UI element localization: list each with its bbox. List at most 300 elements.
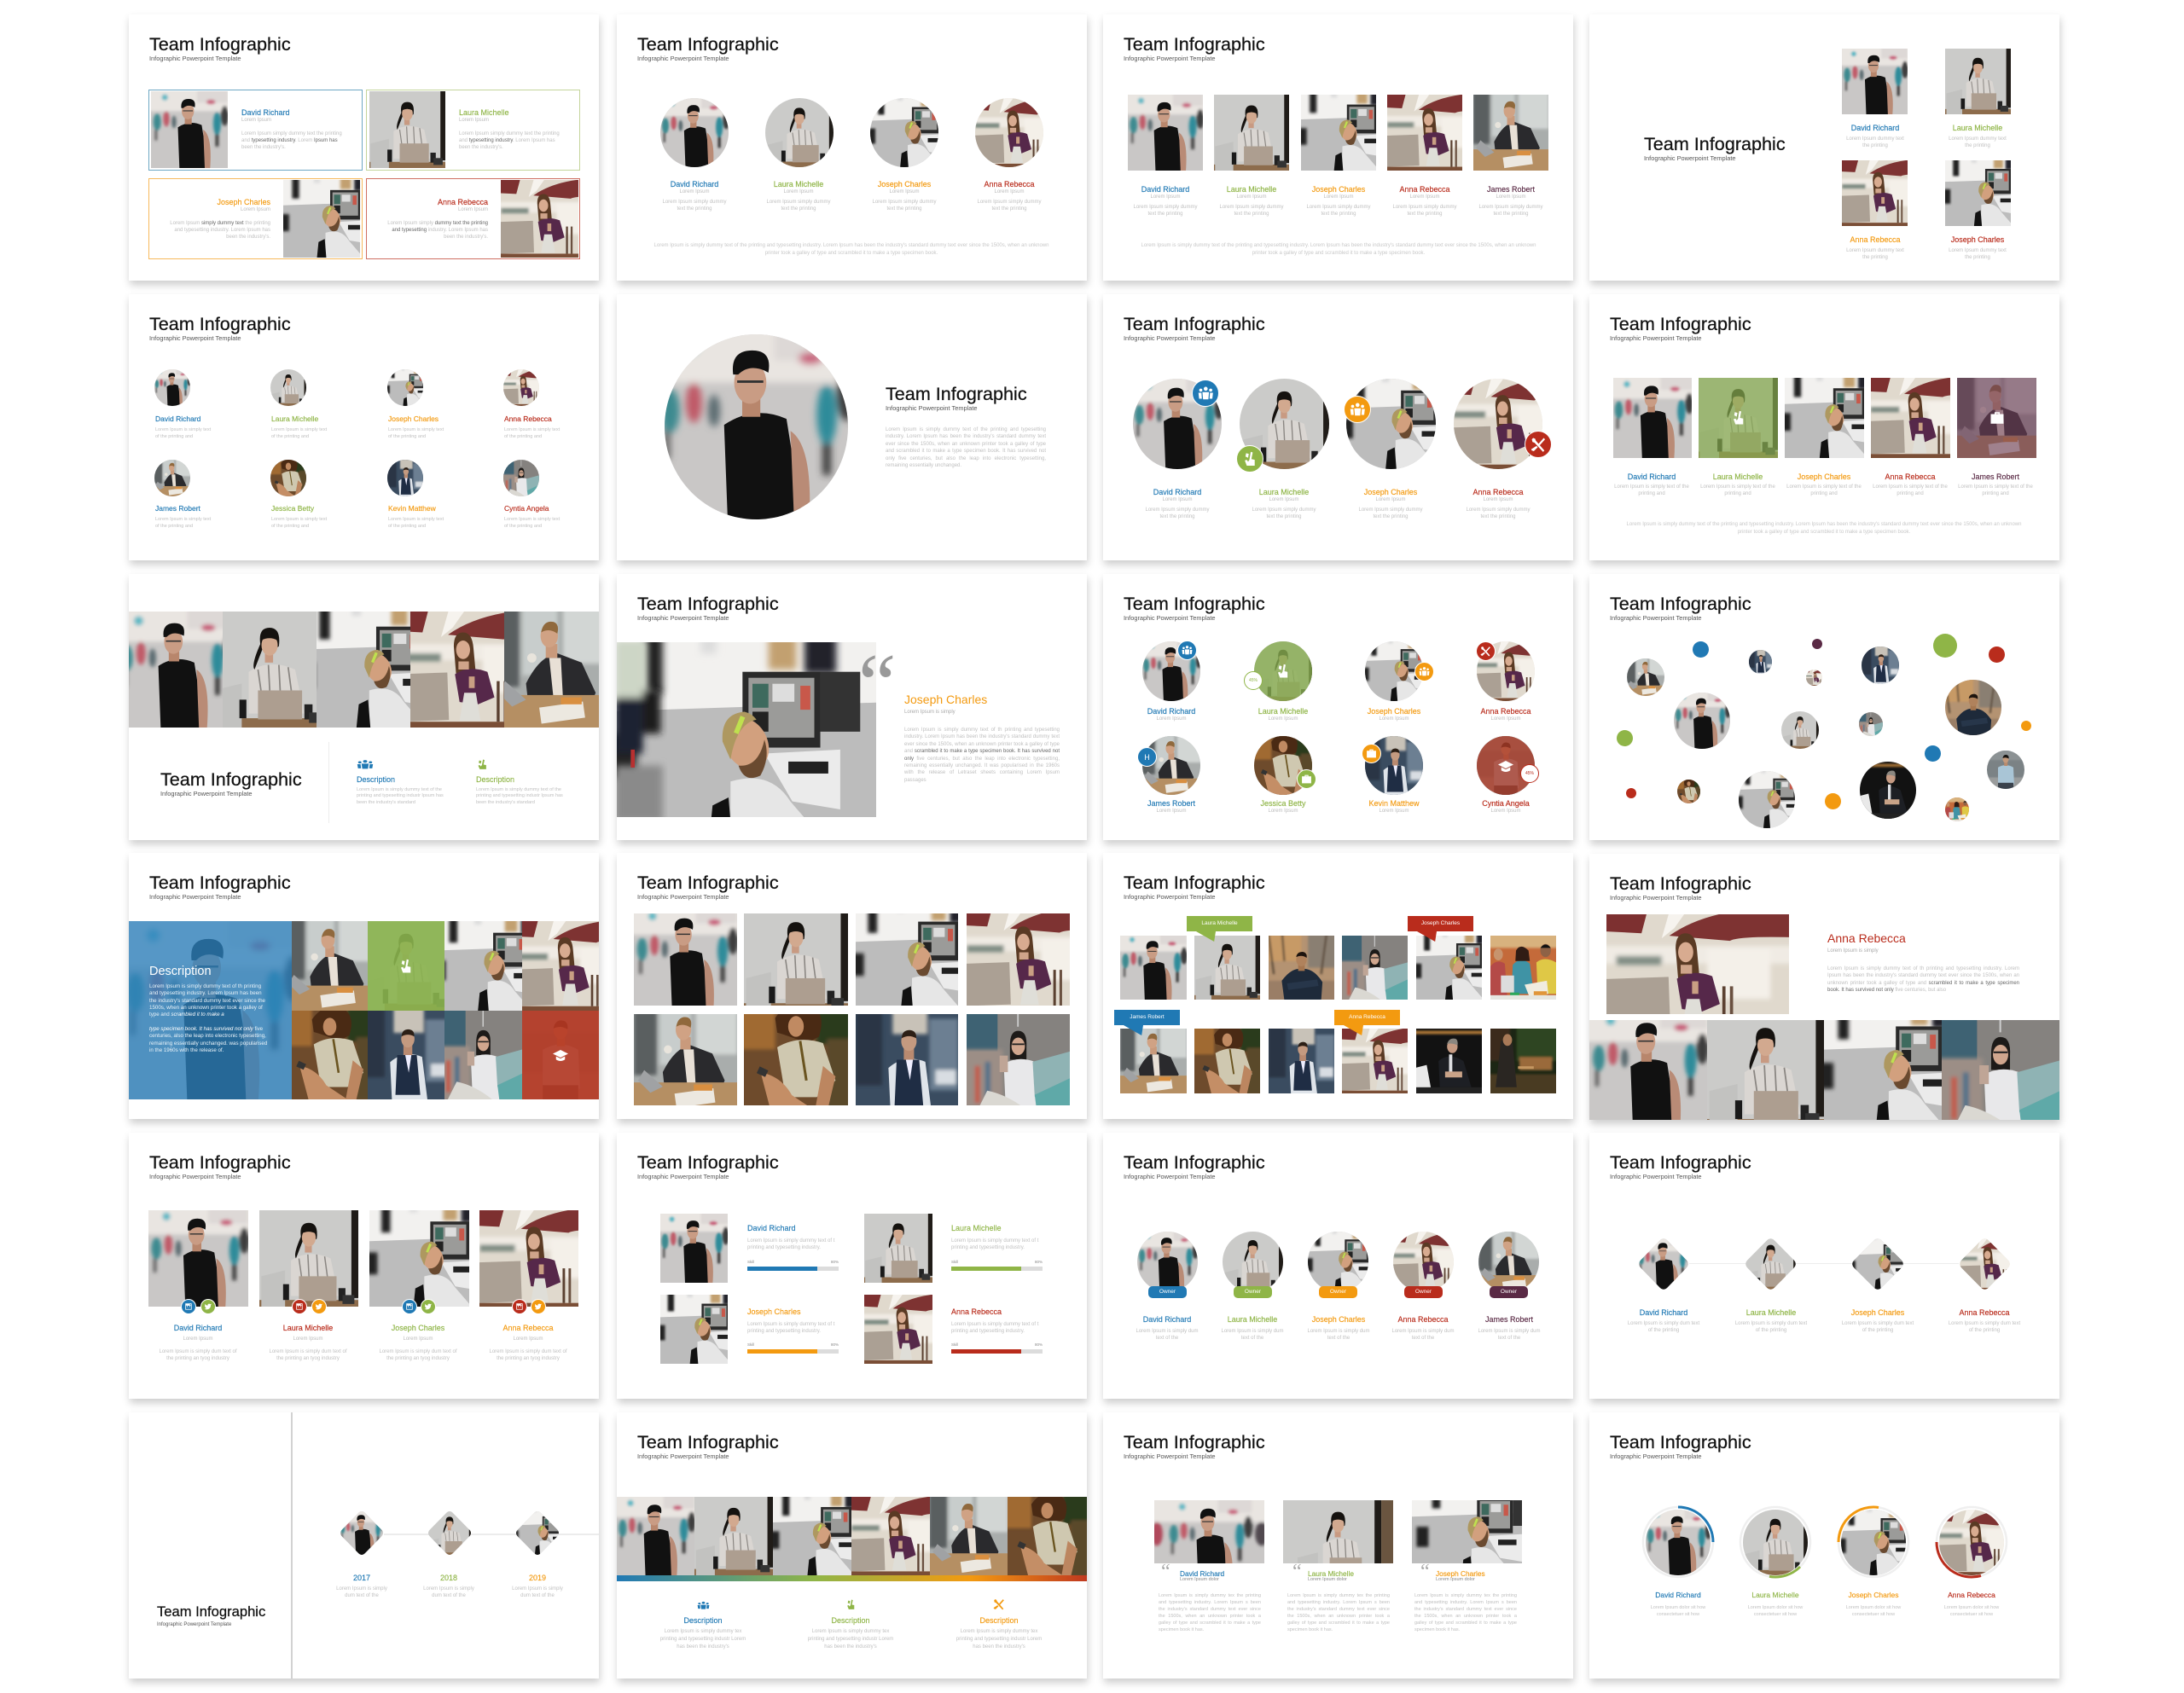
description one: Description [683, 1616, 723, 1625]
dot green [1933, 634, 1957, 658]
blue tinted block [129, 921, 292, 1099]
portrait: Kevin [1365, 736, 1423, 795]
text: David: been the industry's. [241, 145, 286, 150]
panel: circles with icon badges [1103, 294, 1573, 560]
photo: Anna [501, 180, 578, 258]
badge: 45 percent green [1244, 671, 1263, 690]
text: Kevin [1347, 799, 1441, 815]
text: David: David Richard [671, 180, 718, 188]
text: David [1124, 707, 1218, 722]
divider [328, 742, 329, 823]
portrait: David [1133, 379, 1222, 469]
title: Team Infographic [1124, 592, 1265, 614]
band: Laura [694, 1497, 773, 1575]
social: red [292, 1299, 307, 1314]
text: Laura: Laura Michelle [951, 1224, 1002, 1232]
text: Joseph [170, 198, 270, 240]
title: Infographic Powerpoint Template [1610, 894, 1702, 902]
text: Anna [1392, 185, 1457, 217]
photo: Laura [1214, 95, 1289, 171]
text: David: David Richard [1143, 1315, 1191, 1324]
diamond: Anna [1960, 1238, 2010, 1290]
text: Laura [1691, 473, 1785, 497]
text: David: Lorem Ipsum [241, 118, 271, 123]
ring: Anna [1934, 1505, 2009, 1580]
tile: Cyntia [444, 1011, 522, 1099]
text: David: Lorem Ipsum is simply dum [1136, 1329, 1199, 1334]
text: Joseph [371, 1324, 465, 1362]
bubble: group [1945, 797, 1969, 821]
text: David: Lorem Ipsum is simply dum text of [159, 1349, 237, 1354]
text: David: Lorem Ipsum dolor sit how [1651, 1605, 1705, 1610]
text: Anna [1937, 1308, 2031, 1334]
band: Jessica [1008, 1497, 1087, 1575]
caption: printer took a galley of type and scrambled it to make a type specimen book. [1738, 530, 1910, 535]
title: Infographic Powerpoint Template [637, 893, 729, 901]
bubble: blue-shirt man [1987, 751, 2024, 789]
title [1610, 1151, 1755, 1182]
panel: photo band with gradient bar and three descriptions [617, 1412, 1087, 1679]
text: Anna: Lorem Ipsum is simply dum text [1949, 1320, 2020, 1325]
caption: Lorem Ipsum is simply dummy text of the printing and typesetting industry. Lorem Ipsum has been the industry's standard dummy text ever since the 1500s, when an unknown [1141, 243, 1536, 248]
portrait: Anna [503, 369, 539, 406]
diamond: David [1639, 1238, 1688, 1290]
skill label: Laura: Skill [951, 1260, 958, 1264]
text: David: David Richard [155, 415, 200, 423]
caption: printer took a galley of type and scrambled it to make a type specimen book. [1252, 251, 1425, 256]
badge: blue [1137, 747, 1157, 767]
caption: Lorem Ipsum is simply dummy text of the printing and typesetting industry. Lorem Ipsum has been the industry's standard dummy text ever since the 1500s, when an unknown [654, 243, 1048, 248]
description body: and typesetting industry. Lorem Ipsum has been [149, 990, 262, 996]
text: David: Lorem Ipsum simply dummy [1145, 507, 1210, 513]
skill label: David: Skill [747, 1260, 754, 1264]
text: David [1133, 185, 1198, 217]
panel: circles with owner pills [1103, 1133, 1573, 1399]
text: Anna: text of the [1412, 1336, 1434, 1341]
text: Laura: text the printing [1234, 212, 1269, 217]
photo 10 [1342, 1029, 1408, 1093]
photo 7 [1120, 1029, 1187, 1093]
tile: Laura green [368, 921, 444, 1011]
text: Laura: text of the [1241, 1336, 1263, 1341]
text: Laura: Laura Michelle [1227, 185, 1276, 194]
text: David [151, 1324, 245, 1362]
name block: Laura: Lorem Ipsum dolor [1308, 1577, 1347, 1582]
text: Anna: Anna Rebecca [1948, 1591, 1995, 1599]
skill bar: Joseph [747, 1349, 839, 1354]
grid photo: David [634, 913, 737, 1006]
skill label: David: 80% [831, 1260, 839, 1264]
text: James [1949, 473, 2042, 497]
text: David: Lorem Ipsum is simply text [155, 426, 211, 432]
text: Joseph: text the printing [1321, 212, 1356, 217]
text: Laura: text the printing [781, 206, 816, 212]
title: Team Infographic [1610, 1151, 1751, 1172]
description two: Lorem Ipsum is simply dummy text of the [476, 786, 561, 791]
text: Anna: Anna Rebecca [1472, 488, 1524, 496]
photo: Anna [1871, 378, 1950, 458]
band: Joseph [1824, 1020, 1942, 1120]
text: Laura: Laura Michelle [1751, 1591, 1799, 1599]
card border: Anna [366, 178, 580, 259]
text: David: David Richard [1141, 185, 1189, 194]
text: Laura [459, 108, 560, 150]
title: Infographic Powerpoint Template [149, 1173, 241, 1180]
text: Laura: Lorem Ipsum simply dummy [1219, 205, 1284, 210]
text: Laura [271, 415, 357, 440]
title: Team Infographic [149, 312, 291, 334]
panel: four bordered profile cards [129, 14, 599, 281]
text: Anna: consectetuer sit how [1950, 1612, 1993, 1617]
title: Team Infographic [637, 1431, 779, 1452]
text: Joseph: Lorem Ipsum dolor sit how [1846, 1605, 1901, 1610]
panel: twelve photos with callouts [1103, 853, 1573, 1119]
social: blue [181, 1299, 196, 1314]
photo: James [1473, 95, 1548, 171]
social: red 2 [512, 1299, 527, 1314]
text: Anna: printing and typesetting industry. [951, 1329, 1025, 1334]
pill: James: Owner [1501, 1289, 1517, 1295]
photo 1 [1120, 936, 1187, 1000]
social: green [200, 1299, 215, 1314]
text: Laura: Laura Michelle [1258, 707, 1308, 716]
text: Kevin [388, 504, 473, 530]
title: Infographic Powerpoint Template [1644, 154, 1736, 162]
diamond: 2019 [516, 1511, 559, 1555]
diamond: Laura [1745, 1238, 1796, 1290]
panel: circles with colored progress rings [1589, 1412, 2059, 1679]
portrait: Anna [1393, 1232, 1454, 1292]
badge: green [1297, 769, 1316, 789]
badge: 45 percent red: 45% [1525, 771, 1534, 776]
text: David: Lorem Ipsum simply dummy text the printing [241, 131, 342, 136]
grid photo: Laura [744, 913, 848, 1006]
text: David: printing and typesetting industry. [747, 1245, 821, 1250]
text: James: Lorem Ipsum simply dummy [1478, 205, 1543, 210]
text: 2017: dum text of the [345, 1593, 379, 1598]
description three: has been the industry's [973, 1644, 1025, 1650]
photo: David [129, 612, 223, 728]
text: Cyntia: Cyntia Angela [504, 504, 549, 513]
skill label: Anna: Skill [951, 1342, 958, 1347]
text: Anna: text the printing [1480, 514, 1516, 519]
text: Anna: text the printing [1407, 212, 1443, 217]
text: Anna: Anna Rebecca [504, 415, 552, 423]
description two [476, 775, 583, 807]
title: Infographic Powerpoint Template [1124, 1173, 1216, 1180]
name block: David: David Richard [1180, 1569, 1224, 1578]
text: Joseph: Lorem Ipsum simply dummy text the printing [170, 221, 270, 226]
skill label: David [747, 1260, 839, 1265]
photo: Anna [864, 1295, 932, 1364]
text: Anna: Lorem Ipsum is simply text of the [1873, 484, 1948, 490]
tile: James [292, 921, 368, 1011]
text: Anna: Anna Rebecca [1885, 473, 1936, 481]
text: 2017: Lorem Ipsum is simply [336, 1586, 387, 1592]
text: Anna: Anna Rebecca [984, 180, 1035, 188]
text: James [155, 504, 241, 530]
text: Joseph: Joseph Charles [878, 180, 931, 188]
text: Laura [1949, 124, 2007, 148]
text: Anna: Lorem Ipsum simply dummy [1466, 507, 1531, 513]
text: Joseph [1344, 488, 1438, 520]
text: Laura: Lorem Ipsum [1269, 497, 1298, 502]
text: Laura: Laura Michelle [459, 108, 509, 117]
bubble: David [1674, 693, 1730, 749]
bubble: Laura [1781, 711, 1819, 749]
text: James [1478, 185, 1543, 217]
band: Laura [1707, 1020, 1824, 1120]
badge: red tools [1476, 641, 1496, 661]
portrait: Anna [1477, 641, 1535, 701]
text: James: text of the [1498, 1336, 1520, 1341]
title: Team Infographic [1124, 872, 1265, 892]
photo: Joseph [1412, 1500, 1522, 1563]
photo: Anna [1842, 160, 1908, 226]
title: Team Infographic [1610, 312, 1751, 334]
text: David: David Richard [747, 1224, 796, 1232]
text: Laura: text the printing [1266, 514, 1302, 519]
text: David: of the printing and [155, 434, 193, 439]
panel: scattered bubbles [1589, 574, 2059, 840]
bubble: dark suit [1860, 762, 1916, 819]
description three [944, 1616, 1054, 1651]
title: Infographic Powerpoint Template [1124, 1452, 1216, 1460]
text: Kevin: Lorem Ipsum [1379, 809, 1409, 814]
photo: Joseph [660, 1295, 728, 1364]
text: Cyntia [504, 504, 590, 530]
text: Kevin: of the printing and [388, 524, 426, 529]
card border: Joseph [148, 178, 363, 259]
text: Joseph [1949, 235, 2007, 260]
diamond: 2017 [340, 1511, 383, 1555]
dot blue [1693, 641, 1709, 658]
photo: Anna [410, 612, 504, 728]
text: Joseph: Lorem Ipsum is simply dum text [1842, 1320, 1914, 1325]
text: Joseph [747, 1307, 841, 1334]
text: Joseph: Lorem Ipsum [1375, 497, 1406, 502]
text: David: David Richard [1640, 1308, 1687, 1317]
name block: Laura: Laura Michelle [1308, 1569, 1354, 1578]
text: David: Lorem Ipsum is simply text of the [1614, 484, 1689, 490]
description one: Description [357, 775, 395, 784]
portrait: Joseph [1841, 1510, 1906, 1575]
text: James: James Robert [1485, 1315, 1533, 1324]
text: James: Lorem Ipsum is simply dum [1478, 1329, 1541, 1334]
title: Infographic Powerpoint Template [1124, 334, 1216, 342]
caption: Lorem Ipsum is simply dummy text of the printing and typesetting industry. Lorem Ipsum has been the industry's standard dummy text ever since the 1500s, when an unknown [1627, 522, 2021, 527]
text: Laura [766, 180, 831, 212]
text: Laura: Lorem Ipsum is simply text [271, 426, 327, 432]
photo: Joseph [283, 180, 360, 258]
badge: orange [1414, 662, 1434, 681]
bubble: Anna small [1806, 670, 1822, 686]
text: Joseph: Lorem Ipsum is simply text [388, 426, 444, 432]
grid photo: Cyntia [967, 1014, 1070, 1105]
text: Anna: Anna Rebecca [1397, 1315, 1449, 1324]
skill bar: Laura [951, 1266, 1043, 1271]
text: Joseph: text the printing [886, 206, 922, 212]
description body: 1500s, when an unknown printer took a galley of [149, 1005, 263, 1011]
text: David: David Richard [1147, 707, 1195, 716]
text: David [747, 1224, 841, 1250]
text: Joseph: Joseph Charles [388, 415, 439, 423]
text: Cyntia: Lorem Ipsum is simply text [504, 517, 560, 522]
text: Anna: Lorem Ipsum simply dummy text the printing [387, 221, 488, 226]
description body: type specimen book. It has survived not only five [149, 1026, 263, 1032]
text: Joseph: of the printing and [388, 434, 426, 439]
social: orange [311, 1299, 327, 1314]
title: Team Infographic [1610, 872, 1751, 894]
photo: Laura [1283, 1500, 1393, 1563]
text: Joseph [872, 180, 937, 212]
photo: Laura [223, 612, 317, 728]
pill: Laura [1234, 1286, 1272, 1298]
description body: centuries, also the leap into electronic typesetting, [149, 1033, 266, 1039]
text: Joseph [1827, 1591, 1920, 1618]
panel: eight circles with badges [1103, 574, 1573, 840]
photo: David [1842, 49, 1908, 114]
text: James: printing and [1982, 491, 2009, 496]
portrait: Jessica [270, 460, 306, 496]
portrait: James [1142, 736, 1200, 795]
caption: printer took a galley of type and scrambled it to make a type specimen book. [765, 251, 938, 256]
text: Laura: Lorem Ipsum is simply dum text [1735, 1320, 1807, 1325]
text: David: the printing an tyog industry [166, 1356, 229, 1361]
description heading: Description [149, 965, 212, 978]
text: Laura: been the industry's. [459, 145, 503, 150]
description two: has been the industry's [824, 1644, 877, 1650]
text: David: consectetuer sit how [1657, 1612, 1699, 1617]
portrait: Laura [1223, 1232, 1283, 1292]
text: Kevin: Kevin Matthew [388, 504, 436, 513]
photo: Laura with green tint [1699, 378, 1778, 458]
text: Anna [387, 198, 488, 240]
text: Anna: Lorem Ipsum [1409, 194, 1440, 200]
description one: printing and typesetting industr Ipsum has [357, 793, 444, 798]
quote mark: David: “ [1161, 1561, 1170, 1583]
text: Laura [1237, 488, 1331, 520]
body: Laura: Lorem Ipsum is simply dummy tex the printing and typesetting industry. Lorem Ipsum s been the industry's standard dummy text ever since the 1500s, when an unknown printer took a galley of type and scrambled it to make a type specimen book it has. [1287, 1593, 1390, 1632]
description body: Lorem Ipsum is simply dummy text of th printing [149, 983, 261, 989]
description two: Description [476, 775, 514, 784]
text: James: Lorem Ipsum is simply text [155, 517, 211, 522]
skill label: Anna [951, 1342, 1043, 1348]
text: David: Lorem Ipsum [679, 189, 710, 194]
text: Laura: the printing an tyog industry [276, 1356, 340, 1361]
social: blue 2 [402, 1299, 417, 1314]
text: Joseph: the printing an tyog industry [386, 1356, 450, 1361]
text: Jessica [271, 504, 357, 530]
text: David: Lorem Ipsum [183, 1336, 213, 1342]
description three: Lorem Ipsum is simply dummy tex [961, 1629, 1037, 1634]
text: Laura: Lorem Ipsum dolor sit how [1748, 1605, 1803, 1610]
description one [357, 775, 463, 807]
dot red [1989, 646, 2005, 663]
name block: David [1180, 1569, 1257, 1582]
text: Laura [1724, 1308, 1818, 1334]
text: Laura: the printing [1965, 143, 1990, 148]
dot orange lower [1825, 793, 1841, 809]
portrait: Laura [765, 98, 834, 167]
text: David: text the printing [1147, 212, 1183, 217]
text: Jessica: of the printing and [271, 524, 309, 529]
text: James: text the printing [1493, 212, 1529, 217]
title [637, 1151, 782, 1182]
grid photo: Jessica [744, 1014, 848, 1105]
text: Laura: Lorem Ipsum is simply dum [1221, 1329, 1284, 1334]
panel: four portraits with social badges [129, 1133, 599, 1399]
text: Laura: Laura Michelle [283, 1324, 333, 1332]
name block: Joseph: Joseph Charles [1436, 1569, 1485, 1578]
text: James: James Robert [1972, 473, 2019, 481]
title [149, 314, 294, 345]
text: Anna [1863, 473, 1957, 497]
panel: timeline with side title [129, 1412, 599, 1679]
title: Team Infographic [149, 872, 291, 892]
title: Team Infographic [1610, 592, 1751, 614]
photo: Anna [479, 1210, 578, 1307]
title: Infographic Powerpoint Template [1610, 334, 1702, 342]
title: Team Infographic [1124, 32, 1265, 55]
title: Infographic Powerpoint Template [160, 790, 253, 797]
text: Laura: printing and [1724, 491, 1751, 496]
text: Joseph: printing and typesetting industry. [747, 1329, 821, 1334]
text: Anna [977, 180, 1042, 212]
photo: David [1128, 95, 1203, 171]
description three: Description [979, 1616, 1019, 1625]
text: Laura: Lorem Ipsum simply dummy [766, 200, 831, 205]
pill: Anna: Owner [1415, 1289, 1432, 1295]
text: James: Lorem Ipsum is simply text of the [1958, 484, 2033, 490]
text: Laura: of the printing [1756, 1328, 1786, 1333]
quote mark: Joseph: “ [1420, 1561, 1430, 1583]
text: David: and typesetting industry. Lorem Ipsum has [241, 138, 338, 143]
text: Laura: Lorem Ipsum [1268, 716, 1298, 722]
dot orange [2021, 721, 2031, 731]
grid photo: Joseph [856, 913, 958, 1006]
badge: people [1192, 380, 1219, 407]
photo 6 [1490, 936, 1556, 1000]
callout: Anna [1334, 1010, 1400, 1025]
text: Laura [1236, 707, 1330, 722]
title: Infographic Powerpoint Template [1124, 893, 1216, 901]
text: Anna: Anna Rebecca [1399, 185, 1450, 194]
panel: eight-photo grid [617, 853, 1087, 1119]
text: David: David Richard [1655, 1591, 1701, 1599]
dot purple [1812, 639, 1822, 649]
portrait: Laura [1240, 379, 1329, 469]
title [1610, 1431, 1755, 1462]
text: Anna: Anna Rebecca [951, 1307, 1002, 1316]
text: Anna: Anna Rebecca [1480, 707, 1531, 716]
icon: people [357, 759, 374, 770]
panel: diamond portraits on a line [1589, 1133, 2059, 1399]
photo: Joseph [1945, 160, 2011, 226]
tile: red tinted [522, 1011, 599, 1099]
text: David: Lorem Ipsum [1150, 194, 1181, 200]
text: Joseph: been the industry's. [226, 235, 270, 240]
body: Joseph: Lorem Ipsum is simply dummy tex the printing and typesetting industry. Lorem Ipsum s been the industry's standard dummy text ever since the 1500s, when an unknown printer took a galley of type and scrambled it to make a type specimen book it has. [1414, 1593, 1517, 1632]
text: Anna: Lorem Ipsum dummy text [1846, 247, 1904, 252]
bubble: Kevin small [1749, 650, 1772, 674]
title: Infographic Powerpoint Template [886, 404, 978, 412]
panel: three quote profiles [1103, 1412, 1573, 1679]
skill label: Joseph [747, 1342, 839, 1348]
title [1124, 872, 1269, 902]
text: David: Lorem Ipsum dummy text [1846, 136, 1904, 142]
portrait: Joseph [1365, 641, 1423, 701]
